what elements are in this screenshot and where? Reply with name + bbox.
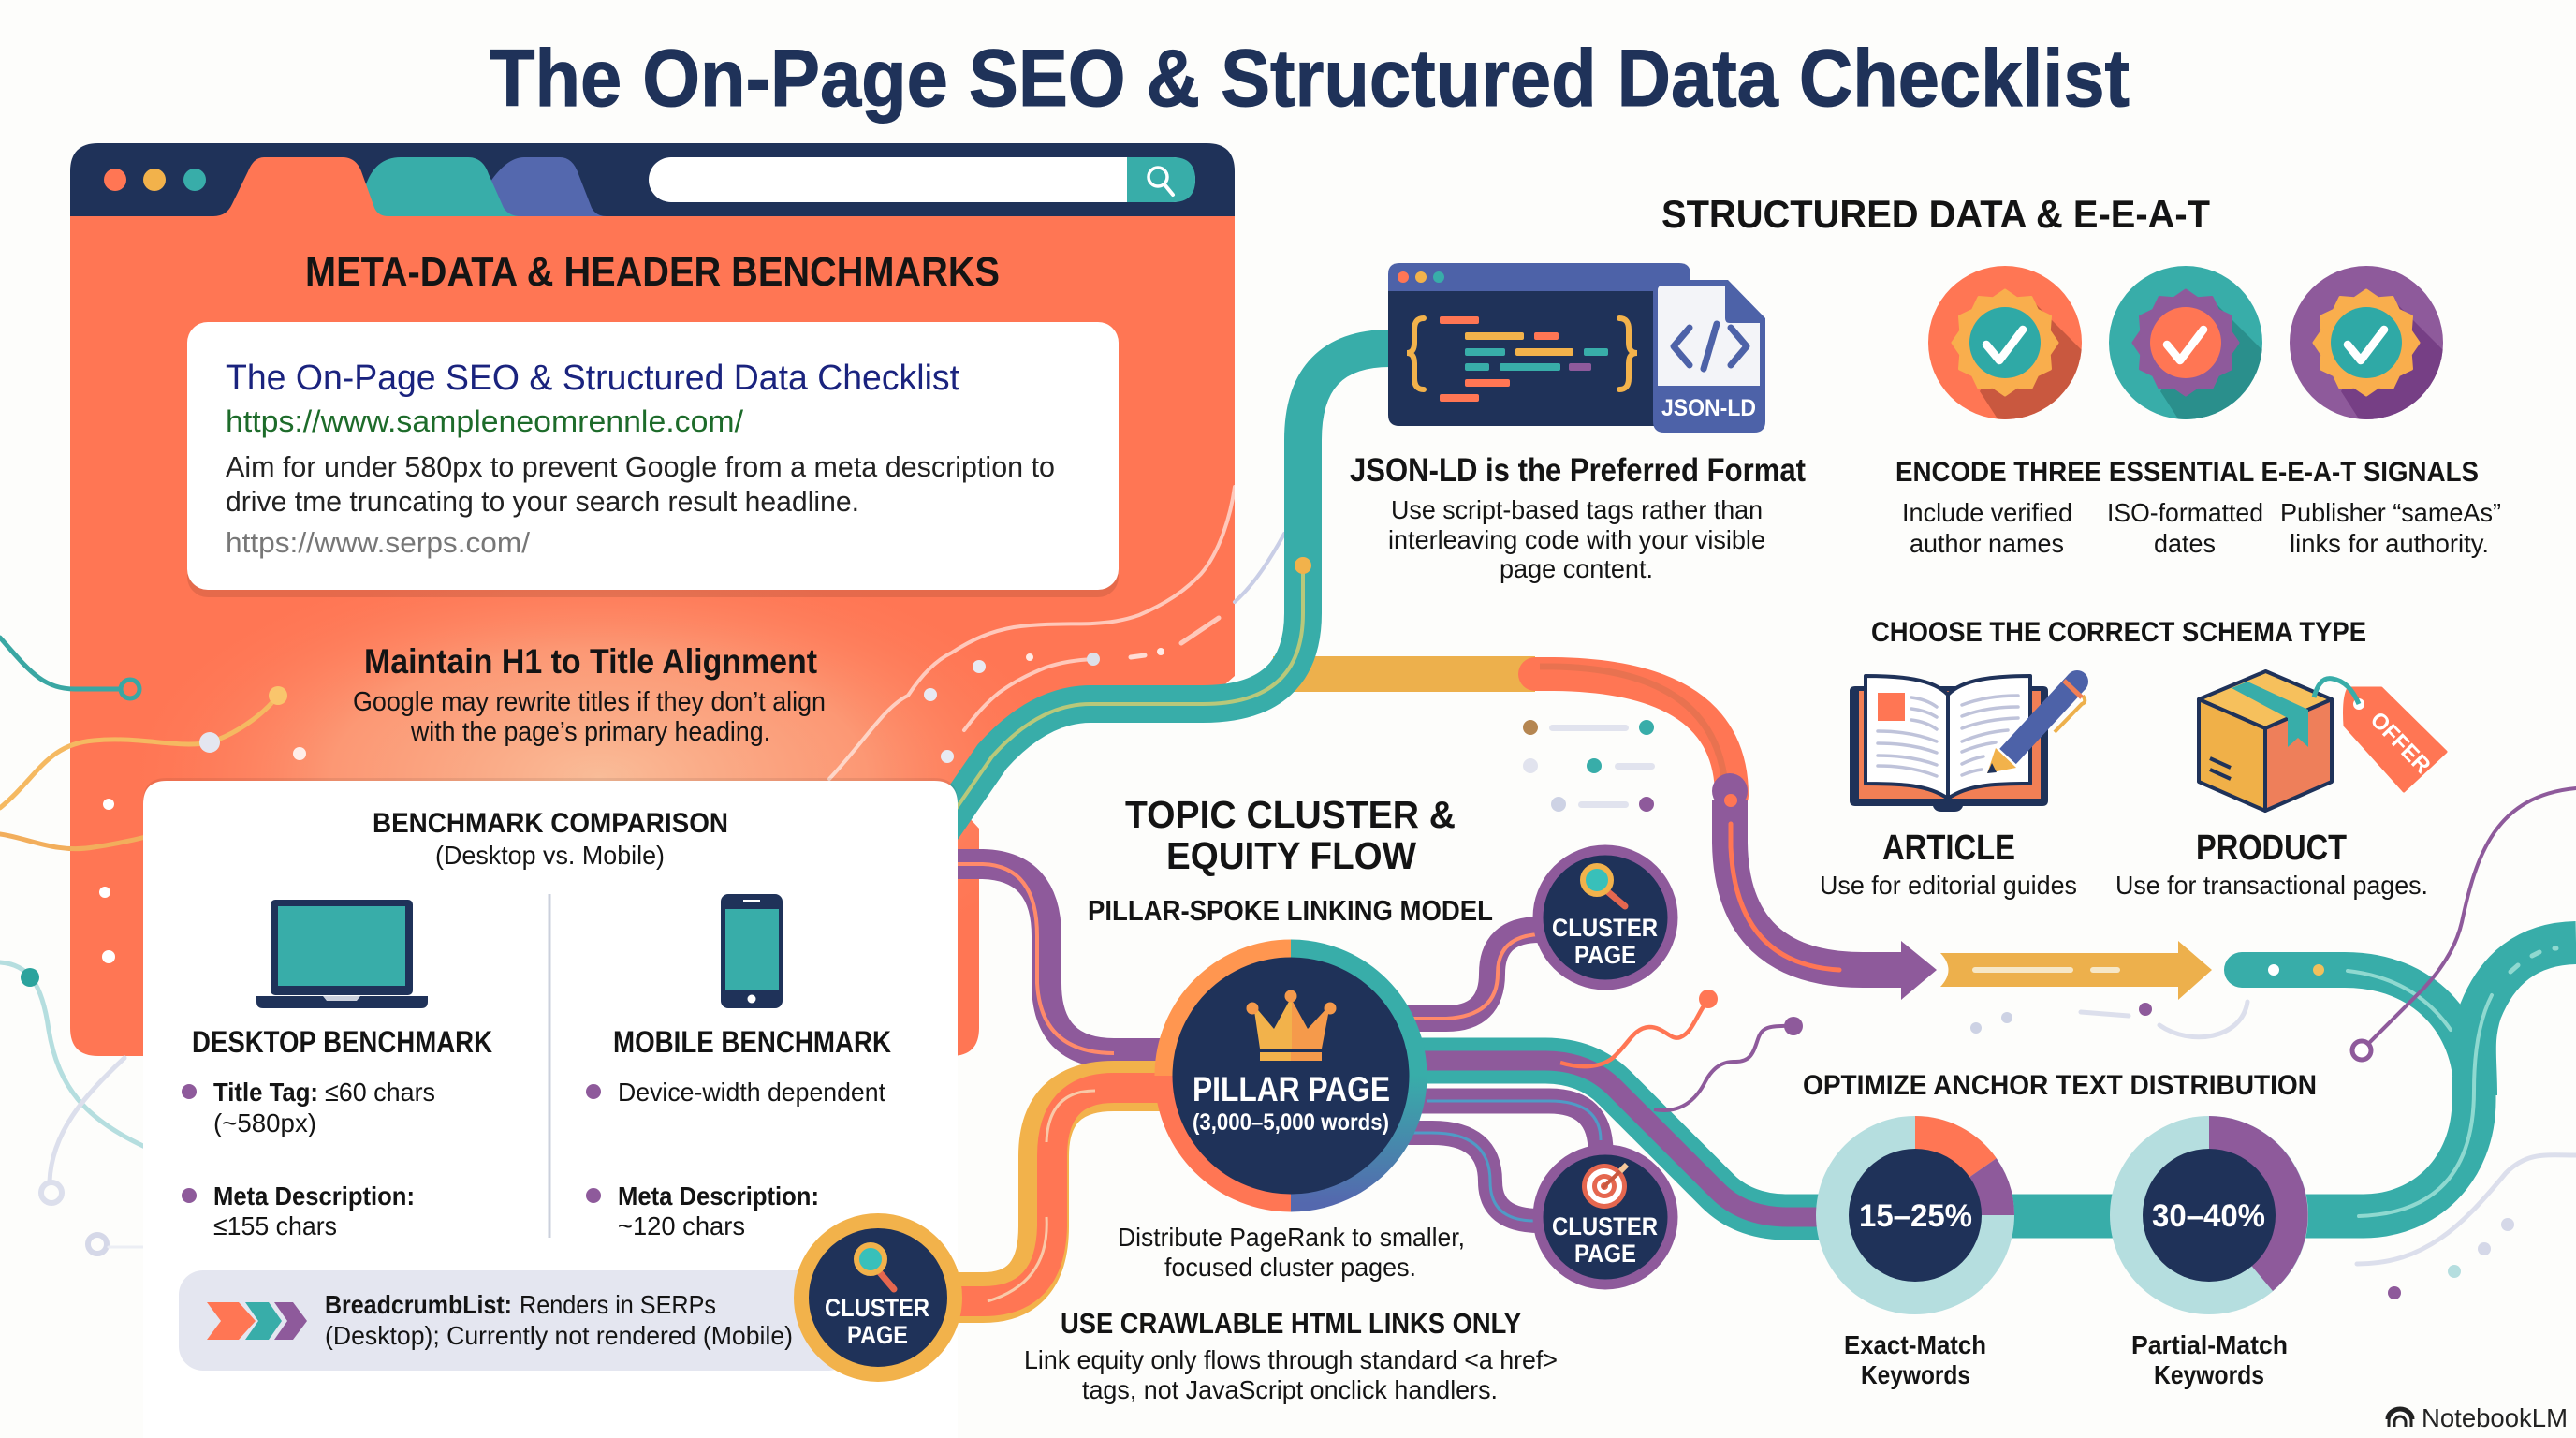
label: exact-match <box>1844 1330 1986 1389</box>
icon: phone <box>721 894 783 1008</box>
node: top cluster page <box>1538 850 1673 985</box>
column: desktop benchmark: (~580px) <box>213 1108 316 1137</box>
icon: E-E-A-T badge 3 <box>2290 266 2443 419</box>
decorative lines on coral <box>99 487 1284 963</box>
column: mobile benchmark: Device-width dependent <box>618 1078 886 1107</box>
text block: JSON-LD <box>1350 452 1806 583</box>
text block: E-E-A-T signals: links for authority. <box>2290 529 2489 558</box>
text block: H1 alignment <box>353 642 826 747</box>
text block: E-E-A-T signals: dates <box>2154 529 2216 558</box>
node: bottom cluster page: CLUSTER <box>1552 1212 1658 1240</box>
text block: article: Use for editorial guides <box>1820 871 2077 900</box>
text block: product <box>2115 829 2428 900</box>
flow arrow: yellow <box>1940 941 2212 1000</box>
text block: crawlable links: Link equity only flows through standard <a href> <box>1024 1345 1558 1374</box>
node: cluster page on panel: PAGE <box>847 1321 908 1349</box>
text block: E-E-A-T signals: author names <box>1910 529 2064 558</box>
label: partial-match <box>2131 1330 2288 1389</box>
column: desktop benchmark: DESKTOP BENCHMARK <box>192 1025 492 1059</box>
search bar <box>649 157 1195 202</box>
text block: crawlable links: tags, not JavaScript onclick handlers. <box>1082 1375 1498 1404</box>
decorative thin lines right <box>1970 788 2576 1299</box>
column: mobile benchmark: ~120 chars <box>618 1211 745 1240</box>
icon: product box with offer tag <box>2199 671 2446 811</box>
flow path: pillar to top cluster page <box>1404 930 1540 1019</box>
squiggle: purple <box>1654 1017 1803 1110</box>
callout: breadcrumb list: BreadcrumbList: <box>325 1290 512 1319</box>
browser body <box>70 216 1235 1059</box>
text block: E-E-A-T signals: Publisher “sameAs” <box>2280 498 2501 527</box>
flow path: teal to JSON-LD <box>936 348 1390 838</box>
node: top cluster page: CLUSTER <box>1552 914 1658 942</box>
text block: crawlable links: USE CRAWLABLE HTML LINKS ONLY <box>1061 1307 1521 1340</box>
panel: search snippet: drive tme truncating to your search result headline. <box>226 485 859 518</box>
donut chart: partial-match <box>2110 1116 2308 1314</box>
node: cluster page on panel <box>801 1221 955 1374</box>
panel: search snippet: https://www.sampleneomrennle.com/ <box>226 404 743 438</box>
icon: chevrons <box>207 1302 307 1340</box>
text block: E-E-A-T signals: ISO-formatted <box>2107 498 2263 527</box>
label: partial-match: Partial-Match <box>2131 1330 2288 1359</box>
column: mobile benchmark: Meta Description: <box>618 1181 819 1211</box>
text block: H1 alignment: Google may rewrite titles if they don’t align <box>353 687 826 717</box>
text block: E-E-A-T signals <box>1895 457 2501 558</box>
node: pillar page: (3,000–5,000 words) <box>1193 1109 1389 1136</box>
node: pillar page: PILLAR PAGE <box>1193 1070 1390 1108</box>
panel: search snippet: The On-Page SEO & Structured Data Checklist <box>226 359 959 398</box>
icon: magnifier <box>856 1245 894 1289</box>
node: top cluster page: PAGE <box>1574 941 1636 969</box>
flow path: purple from panel to pillar <box>958 864 1170 1053</box>
donut chart: exact-match: 15–25% <box>1859 1198 1972 1234</box>
flow path: yellow and coral <box>1273 667 1732 796</box>
column: mobile benchmark: MOBILE BENCHMARK <box>613 1025 891 1059</box>
NotebookLM logo: NotebookLM <box>2422 1403 2568 1432</box>
text block: JSON-LD: JSON-LD is the Preferred Format <box>1350 452 1806 489</box>
callout: breadcrumb list: (Desktop); Currently not rendered (Mobile) <box>325 1321 793 1350</box>
icon: E-E-A-T badge 1 <box>1928 266 2082 419</box>
icon: product box with offer tag: OFFER <box>2365 707 2436 779</box>
panel: browser window <box>70 143 1235 1059</box>
icon: JSON-LD code window: JSON-LD <box>1661 395 1756 421</box>
flow path: main band to anchor text <box>1409 1061 1821 1217</box>
heading: topic cluster: EQUITY FLOW <box>1166 834 1416 877</box>
flow path: teal right loop <box>1797 943 2576 1216</box>
heading: schema type: CHOOSE THE CORRECT SCHEMA TYPE <box>1871 617 2366 648</box>
label: partial-match: Keywords <box>2154 1360 2264 1389</box>
panel: search snippet: https://www.serps.com/ <box>226 526 530 559</box>
text block: distribute pagerank: Distribute PageRank to smaller, <box>1118 1223 1465 1252</box>
node: cluster page on panel: CLUSTER <box>825 1294 929 1322</box>
node: pillar page <box>1164 948 1418 1203</box>
heading: topic cluster: TOPIC CLUSTER & <box>1125 793 1456 836</box>
text block: article <box>1820 829 2077 900</box>
node: bottom cluster page <box>1538 1150 1673 1284</box>
column: desktop benchmark: ≤60 chars <box>325 1078 435 1107</box>
icon: laptop <box>256 900 428 1008</box>
icon: target <box>1582 1164 1627 1209</box>
panel: benchmark comparison: BENCHMARK COMPARISON <box>373 808 728 839</box>
callout: breadcrumb list: Renders in SERPs <box>520 1290 716 1319</box>
text block: E-E-A-T signals: ENCODE THREE ESSENTIAL E-E-A-T SIGNALS <box>1895 457 2479 488</box>
icon: crown <box>1247 990 1337 1061</box>
column: desktop benchmark <box>182 1025 492 1240</box>
panel: benchmark comparison: (Desktop vs. Mobile) <box>435 841 665 870</box>
icon: magnifier <box>1583 866 1625 906</box>
text block: distribute pagerank: focused cluster pages. <box>1164 1253 1416 1282</box>
column: mobile benchmark <box>586 1025 891 1240</box>
column: desktop benchmark: Meta Description: <box>213 1181 415 1211</box>
text block: article: ARTICLE <box>1882 829 2015 868</box>
node: bottom cluster page: PAGE <box>1574 1240 1636 1268</box>
text block: H1 alignment: with the page’s primary heading. <box>410 717 770 747</box>
title: The On-Page SEO & Structured Data Checklist <box>490 34 2130 124</box>
text block: H1 alignment: Maintain H1 to Title Alignment <box>364 642 817 681</box>
decorative dot rows <box>1523 720 1655 812</box>
callout: breadcrumb list <box>179 1270 853 1371</box>
icon: JSON-LD code window <box>1388 263 1765 433</box>
panel: benchmark comparison <box>143 778 958 1438</box>
text block: product: PRODUCT <box>2196 829 2347 868</box>
column: desktop benchmark: ≤155 chars <box>213 1211 337 1240</box>
label: exact-match: Exact-Match <box>1844 1330 1986 1359</box>
donut chart: partial-match: 30–40% <box>2152 1198 2265 1234</box>
icon: open book with pencil <box>1850 670 2088 812</box>
heading: meta-data: META-DATA & HEADER BENCHMARKS <box>305 249 1000 295</box>
text block: product: Use for transactional pages. <box>2115 871 2428 900</box>
heading: topic cluster <box>1125 793 1456 877</box>
text block: JSON-LD: interleaving code with your visible <box>1388 525 1765 554</box>
text block: E-E-A-T signals: Include verified <box>1902 498 2072 527</box>
text block: JSON-LD: Use script-based tags rather than <box>1391 495 1763 524</box>
label: exact-match: Keywords <box>1861 1360 1970 1389</box>
column: desktop benchmark: Title Tag: <box>213 1078 318 1107</box>
flow path: yellow-coral from cluster page to pillar <box>955 1086 1170 1301</box>
squiggle: coral <box>1560 990 1718 1066</box>
heading: pillar-spoke: PILLAR-SPOKE LINKING MODEL <box>1088 894 1493 927</box>
browser title bar <box>70 143 1235 216</box>
donut chart: exact-match <box>1816 1116 2014 1314</box>
icon: E-E-A-T badge 2 <box>2109 266 2262 419</box>
text block: crawlable links <box>1024 1307 1558 1404</box>
panel: search snippet: Aim for under 580px to prevent Google from a meta description to <box>226 450 1055 483</box>
flow arrow: purple <box>1712 773 1937 1000</box>
panel: search snippet <box>187 322 1119 597</box>
text block: distribute pagerank <box>1118 1223 1465 1282</box>
window control dots <box>104 169 206 191</box>
text block: JSON-LD: page content. <box>1500 554 1653 583</box>
heading: anchor text: OPTIMIZE ANCHOR TEXT DISTRIBUTION <box>1803 1070 2317 1101</box>
decorative thin lines left <box>0 638 278 1254</box>
heading: structured data: STRUCTURED DATA & E-E-A-T <box>1661 192 2210 236</box>
browser tabs <box>213 157 607 216</box>
flow paths: pillar to bottom cluster page <box>1395 1101 1601 1221</box>
